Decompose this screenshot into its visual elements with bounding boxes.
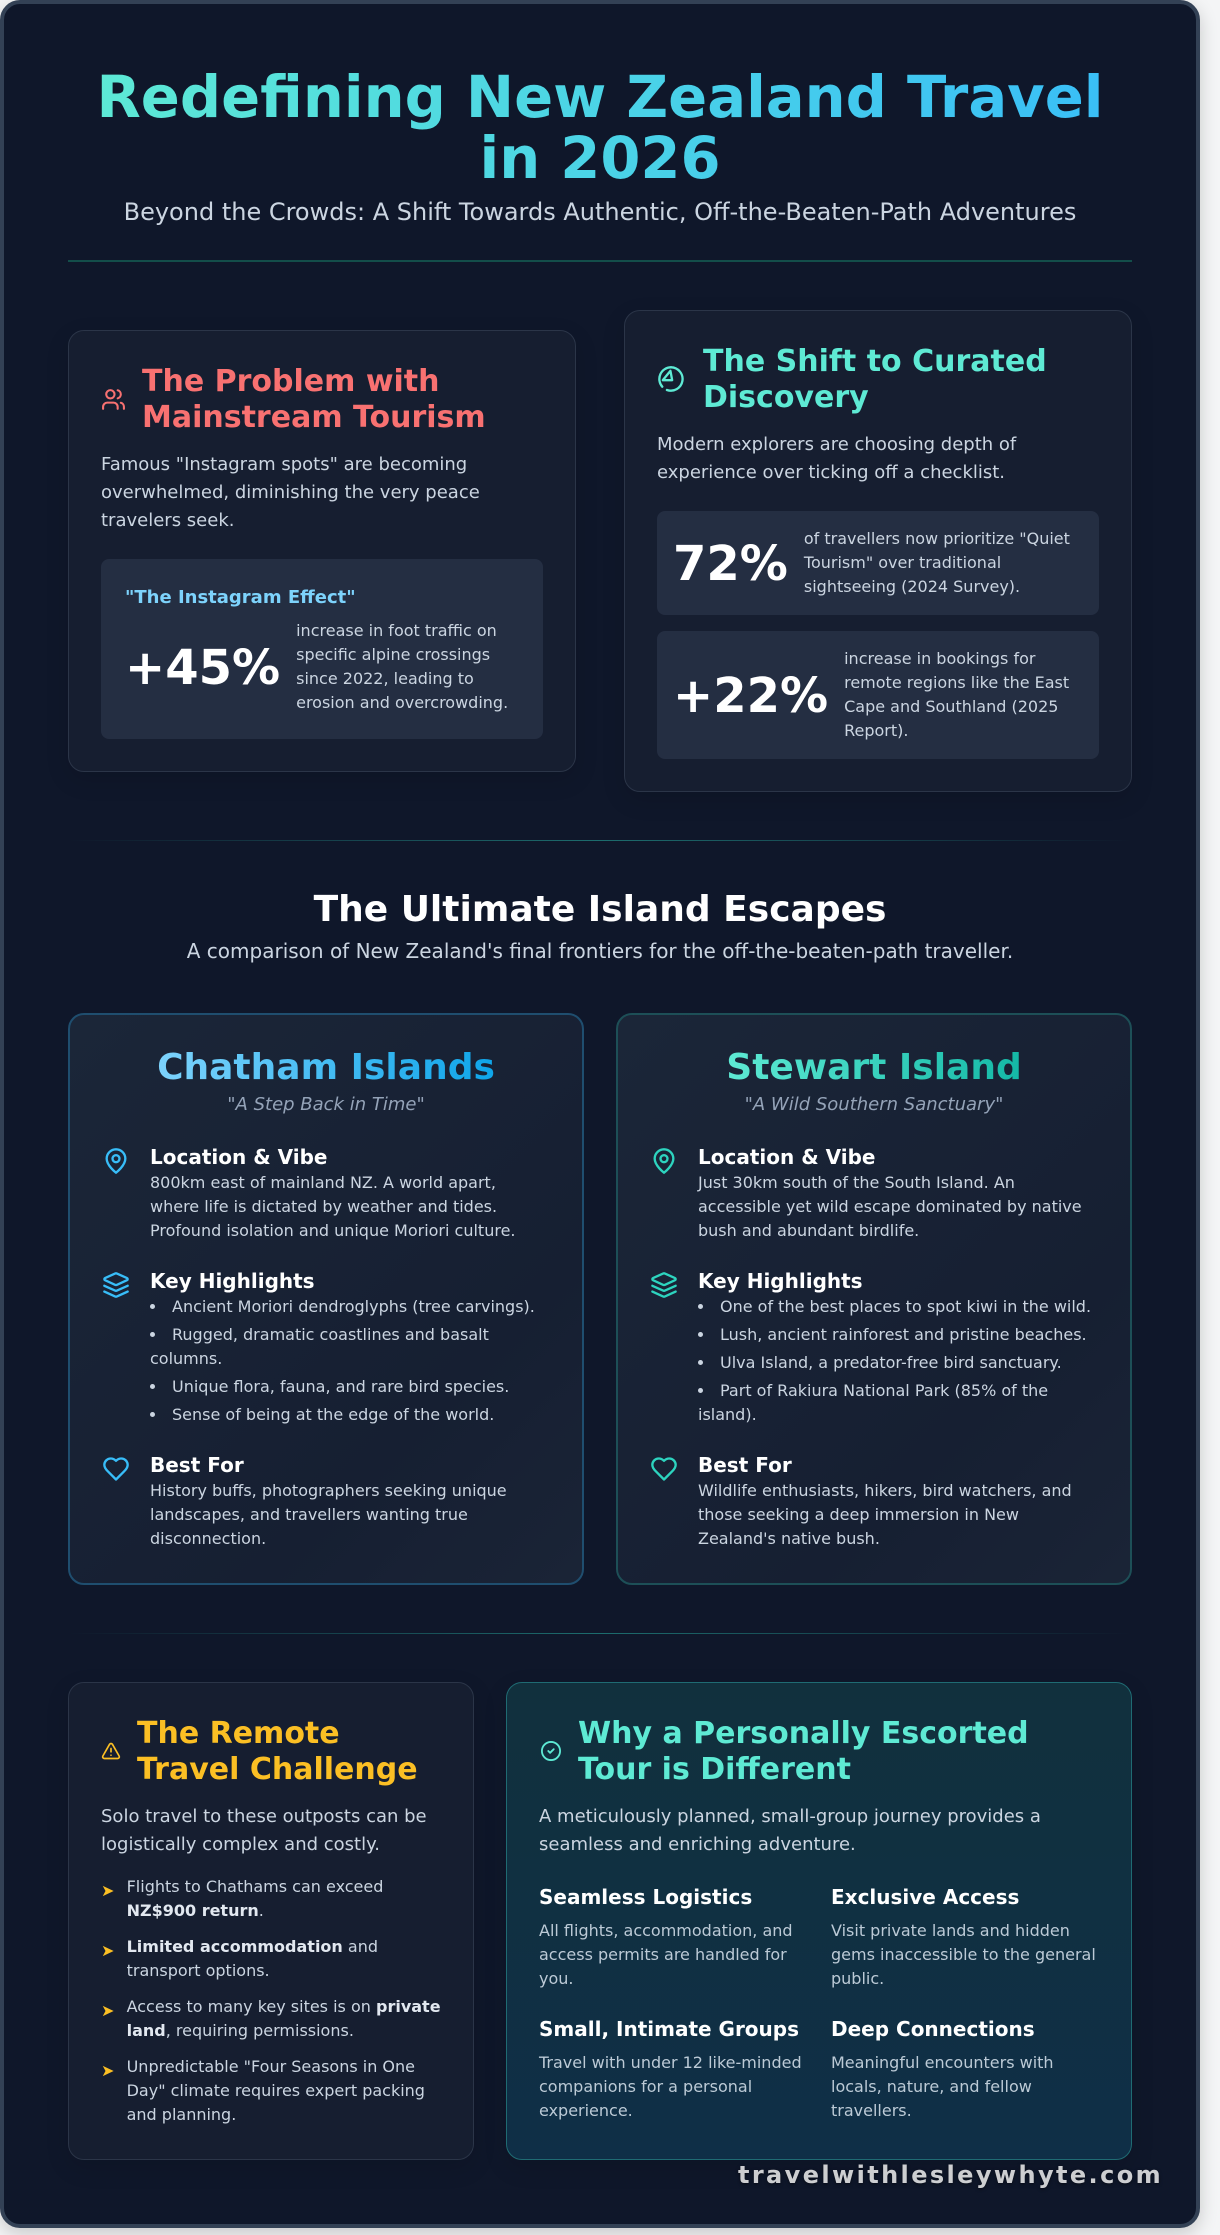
item: best for: Best For (698, 1453, 792, 1477)
icon: map pin (106, 1148, 126, 1174)
item: location and vibe: Location & Vibe (698, 1145, 875, 1169)
benefit: deep connections: Meaningful encounters with locals, nature, and fellow travellers. (831, 2053, 1054, 2120)
benefit: small groups: Travel with under 12 like-minded companions for a personal experience. (539, 2053, 802, 2120)
panel: why a personally escorted tour is different (506, 1682, 1132, 2160)
section subtitle: A comparison of New Zealand's final frontiers for the off-the-beaten-path traveller. (187, 939, 1013, 963)
text: challenge intro: Solo travel to these outposts can be logistically complex and costly. (101, 1806, 427, 1855)
item: best for: Wildlife enthusiasts, hikers, bird watchers, and those seeking a deep immersion in New Zealand's native bush. (698, 1481, 1072, 1548)
stat: +22%: +22% (673, 668, 828, 724)
item: location and vibe (106, 1145, 516, 1240)
benefit: seamless logistics (539, 1885, 793, 1988)
benefit: seamless logistics: All flights, accommodation, and access permits are handled for you. (539, 1921, 793, 1988)
island name: Chatham Islands (157, 1047, 495, 1088)
item: location and vibe (654, 1145, 1082, 1240)
panel: the remote travel challenge (68, 1682, 474, 2160)
list: challenges: ➤ (101, 2061, 114, 2080)
subtitle: Beyond the Crowds: A Shift Towards Authentic, Off-the-Beaten-Path Adventures (124, 198, 1076, 226)
item: best for: History buffs, photographers seeking unique landscapes, and travellers wanting true disconnection. (150, 1481, 507, 1548)
icon: check circle (541, 1741, 561, 1761)
benefit: deep connections (831, 2017, 1054, 2120)
stat: +22%: increase in bookings for remote regions like the East Cape and Southland (2025 Report). (844, 649, 1069, 740)
list: challenges: ➤ (101, 2001, 114, 2020)
heading: challenge: The Remote Travel Challenge (137, 1716, 418, 1787)
island tagline: "A Step Back in Time" (227, 1094, 425, 1115)
panel: the problem with mainstream tourism (68, 330, 576, 772)
item: key highlights (651, 1269, 1091, 1424)
callout: the Instagram effect (101, 559, 543, 739)
heading: shift: The Shift to Curated Discovery (703, 344, 1047, 415)
panel: Chatham Islands (68, 1013, 584, 1585)
benefit: exclusive access: Exclusive Access (831, 1885, 1019, 1909)
title: Redefining New Zealand Travel in 2026 (96, 64, 1104, 192)
item: key highlights: Ancient Moriori dendroglyphs (tree carvings). (172, 1297, 535, 1316)
list: challenges: ➤ (101, 1941, 114, 1960)
panel: the shift to curated discovery (624, 310, 1132, 792)
stat: +45%: increase in foot traffic on specific alpine crossings since 2022, leading to erosion and overcrowding. (296, 621, 508, 712)
section heading: island escapes: The Ultimate Island Escapes (314, 889, 886, 930)
list: challenges: Limited accommodation and transport options. (127, 1937, 378, 1980)
text: shift intro: Modern explorers are choosing depth of experience over ticking off a checklist. (657, 434, 1016, 483)
text: escorted intro: A meticulously planned, small-group journey provides a seamless and enriching adventure. (539, 1806, 1041, 1855)
item: key highlights: Key Highlights (150, 1269, 315, 1293)
icon: heart (103, 1457, 129, 1481)
benefit: seamless logistics: Seamless Logistics (539, 1885, 752, 1909)
benefit: small groups (538, 2017, 802, 2120)
icon: map pin (654, 1148, 674, 1174)
item: best for (103, 1453, 507, 1548)
item: location and vibe: 800km east of mainland NZ. A world apart, where life is dictated by weather and tides. Profound isolation and unique Moriori culture. (150, 1173, 516, 1240)
item: key highlights: Unique flora, fauna, and rare bird species. (172, 1377, 509, 1396)
list: challenges: ➤ (101, 1881, 114, 1900)
benefits grid (538, 1885, 1096, 2120)
island name: Stewart Island (726, 1047, 1022, 1088)
icon: layers (651, 1272, 677, 1298)
icon: warning triangle (102, 1742, 120, 1760)
callout heading: "The Instagram Effect" (125, 587, 356, 608)
icon: heart (651, 1457, 677, 1481)
panel: Stewart Island (616, 1013, 1132, 1585)
item: key highlights (103, 1269, 535, 1424)
benefit: exclusive access: Visit private lands and hidden gems inaccessible to the general public. (831, 1921, 1096, 1988)
item: location and vibe: Just 30km south of the South Island. An accessible yet wild escape dominated by native bush and abundant birdlife. (698, 1173, 1082, 1240)
icon: users (102, 389, 125, 410)
item: best for (651, 1453, 1072, 1548)
item: location and vibe: Location & Vibe (150, 1145, 327, 1169)
item: key highlights: Ulva Island, a predator-free bird sanctuary. (720, 1353, 1062, 1372)
list: challenges: Access to many key sites is on private land, requiring permissions. (127, 1997, 441, 2040)
icon: discovery dial (658, 366, 684, 392)
stat: 72%: 72% (673, 536, 788, 592)
stat: 72% (657, 511, 1099, 615)
stat: +45% (125, 621, 508, 712)
item: key highlights: Lush, ancient rainforest and pristine beaches. (720, 1325, 1087, 1344)
icon: layers (103, 1272, 129, 1298)
footer website: travelwithlesleywhyte.com (738, 2161, 1163, 2189)
item: key highlights: Key Highlights (698, 1269, 863, 1293)
item: key highlights: One of the best places to spot kiwi in the wild. (720, 1297, 1091, 1316)
stat: 72%: of travellers now prioritize "Quiet Tourism" over traditional sightseeing (2024 Survey). (804, 529, 1070, 596)
heading: escorted tour: Why a Personally Escorted Tour is Different (578, 1716, 1029, 1787)
benefit: deep connections: Deep Connections (831, 2017, 1035, 2041)
stat: +22% (657, 631, 1099, 759)
list: challenges: Unpredictable "Four Seasons in One Day" climate requires expert packing and planning. (127, 2057, 425, 2124)
benefit: exclusive access (831, 1885, 1096, 1988)
item: best for: Best For (150, 1453, 244, 1477)
stat: +45%: +45% (125, 640, 280, 696)
heading: problem: The Problem with Mainstream Tourism (142, 364, 486, 435)
item: key highlights: Rugged, dramatic coastlines and basalt columns. (150, 1325, 489, 1368)
item: key highlights: Part of Rakiura National Park (85% of the island). (698, 1381, 1048, 1424)
list: challenges (101, 1877, 441, 2124)
benefit: small groups: Small, Intimate Groups (539, 2017, 799, 2041)
island tagline: "A Wild Southern Sanctuary" (745, 1094, 1003, 1115)
list: challenges: Flights to Chathams can exceed NZ$900 return. (127, 1877, 383, 1920)
item: key highlights: Sense of being at the edge of the world. (172, 1405, 494, 1424)
text: problem intro: Famous "Instagram spots" are becoming overwhelmed, diminishing the very peace travelers seek. (101, 454, 480, 531)
